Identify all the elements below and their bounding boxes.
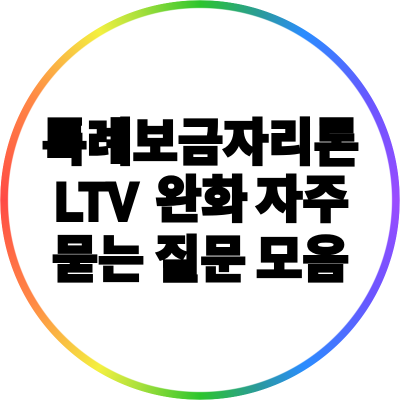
title line 2: LTV [55, 173, 138, 232]
title line 1: 특례보금자리론 [42, 115, 359, 171]
title line 2 [55, 172, 349, 232]
title line 3: 질문 [155, 232, 246, 288]
title line 3: 묻는 [52, 232, 144, 288]
title line 2: 자주 [256, 172, 349, 228]
title line 3: 모음 [256, 232, 349, 288]
title line 3 [52, 232, 349, 288]
title line 2: 완화 [156, 172, 248, 228]
